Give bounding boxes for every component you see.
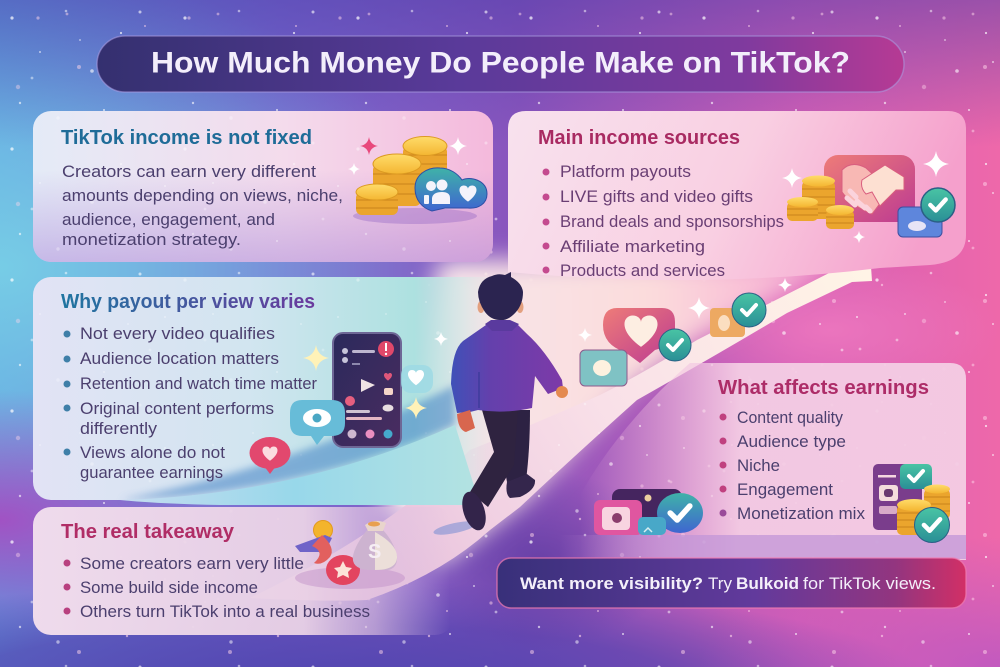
body text: monetization strategy. (62, 230, 241, 249)
bullet list: Products and services (560, 261, 725, 280)
icon: money bag (353, 521, 397, 570)
bullet list: Not every video qualifies (80, 324, 275, 343)
back leg and shoe (498, 410, 530, 482)
bullet list: Some creators earn very little (80, 554, 304, 573)
jacket (451, 325, 563, 413)
heading: Main income sources (538, 126, 740, 149)
heading: Why payout per view varies (61, 290, 315, 313)
bullet list (720, 408, 865, 523)
body text (62, 162, 343, 249)
bullet list (64, 324, 317, 482)
bullet list: guarantee earnings (80, 463, 223, 482)
icon: heart bubble teal (401, 365, 433, 393)
bullet list: Views alone do not (80, 443, 225, 462)
bullet list: Niche (737, 456, 780, 475)
icon: handshake with coins and check (782, 151, 955, 243)
icon: megaphone and coin (295, 520, 332, 564)
icon: star badge (326, 555, 360, 585)
bullet list: Original content performs (80, 399, 274, 418)
bullet list: Retention and watch time matter (80, 374, 317, 393)
call to action banner: Bulkoid (736, 574, 799, 593)
call to action banner: for TikTok views. (803, 574, 936, 593)
bullet list: Engagement (737, 480, 833, 499)
panel: Main income sources (508, 111, 966, 280)
head and hair (478, 272, 523, 320)
shadow (432, 519, 478, 537)
rising road arrow (250, 252, 872, 601)
heading: What affects earnings (718, 376, 929, 399)
pale glow zone around the walker (380, 260, 880, 565)
icon: phone with play button (333, 333, 401, 447)
bullet list: Platform payouts (560, 162, 691, 181)
body text: audience, engagement, and (62, 210, 275, 229)
ears (478, 301, 524, 313)
bullet list (542, 162, 784, 280)
bullet list: Audience location matters (80, 349, 279, 368)
bullet list: Some build side income (80, 578, 258, 597)
bullet list: Affiliate marketing (560, 237, 705, 256)
call to action banner: Try (708, 574, 732, 593)
icon: document, coins and checks (873, 464, 950, 542)
front leg and shoe (470, 410, 518, 507)
bullet list: Brand deals and sponsorships (560, 212, 784, 231)
bullet list: differently (80, 419, 158, 438)
hands (457, 410, 475, 432)
panel: What affects earnings (550, 363, 966, 560)
icon: heart badge with check (578, 297, 710, 386)
bullet list: Audience type (737, 432, 846, 451)
body text: amounts depending on views, niche, (62, 186, 343, 205)
icon: camera, check bubble and tile (594, 489, 703, 535)
bullet list: Content quality (737, 408, 843, 427)
icon: coin stacks and community bubble (348, 136, 487, 224)
icon: money bag: S (368, 541, 381, 563)
call to action banner: Want more visibility? (520, 574, 703, 593)
panel: Why payout per view varies (33, 277, 513, 505)
call to action banner (497, 558, 966, 608)
icon: eye bubble (290, 400, 345, 445)
title text: How Much Money Do People Make on TikTok? (151, 46, 850, 80)
heading: TikTok income is not fixed (61, 126, 312, 149)
bullet list: Monetization mix (737, 504, 865, 523)
icon: heart bubble red (250, 437, 290, 474)
title bar (97, 36, 904, 92)
body text: Creators can earn very different (62, 162, 316, 181)
panel: The real takeaway (33, 507, 453, 635)
panel: TikTok income is not fixed (33, 111, 493, 262)
icon: photo tile with check (710, 278, 792, 337)
bullet list (64, 554, 370, 621)
heading: The real takeaway (61, 520, 235, 543)
bullet list: LIVE gifts and video gifts (560, 187, 753, 206)
bullet list: Others turn TikTok into a real business (80, 602, 370, 621)
person walking (432, 272, 568, 537)
